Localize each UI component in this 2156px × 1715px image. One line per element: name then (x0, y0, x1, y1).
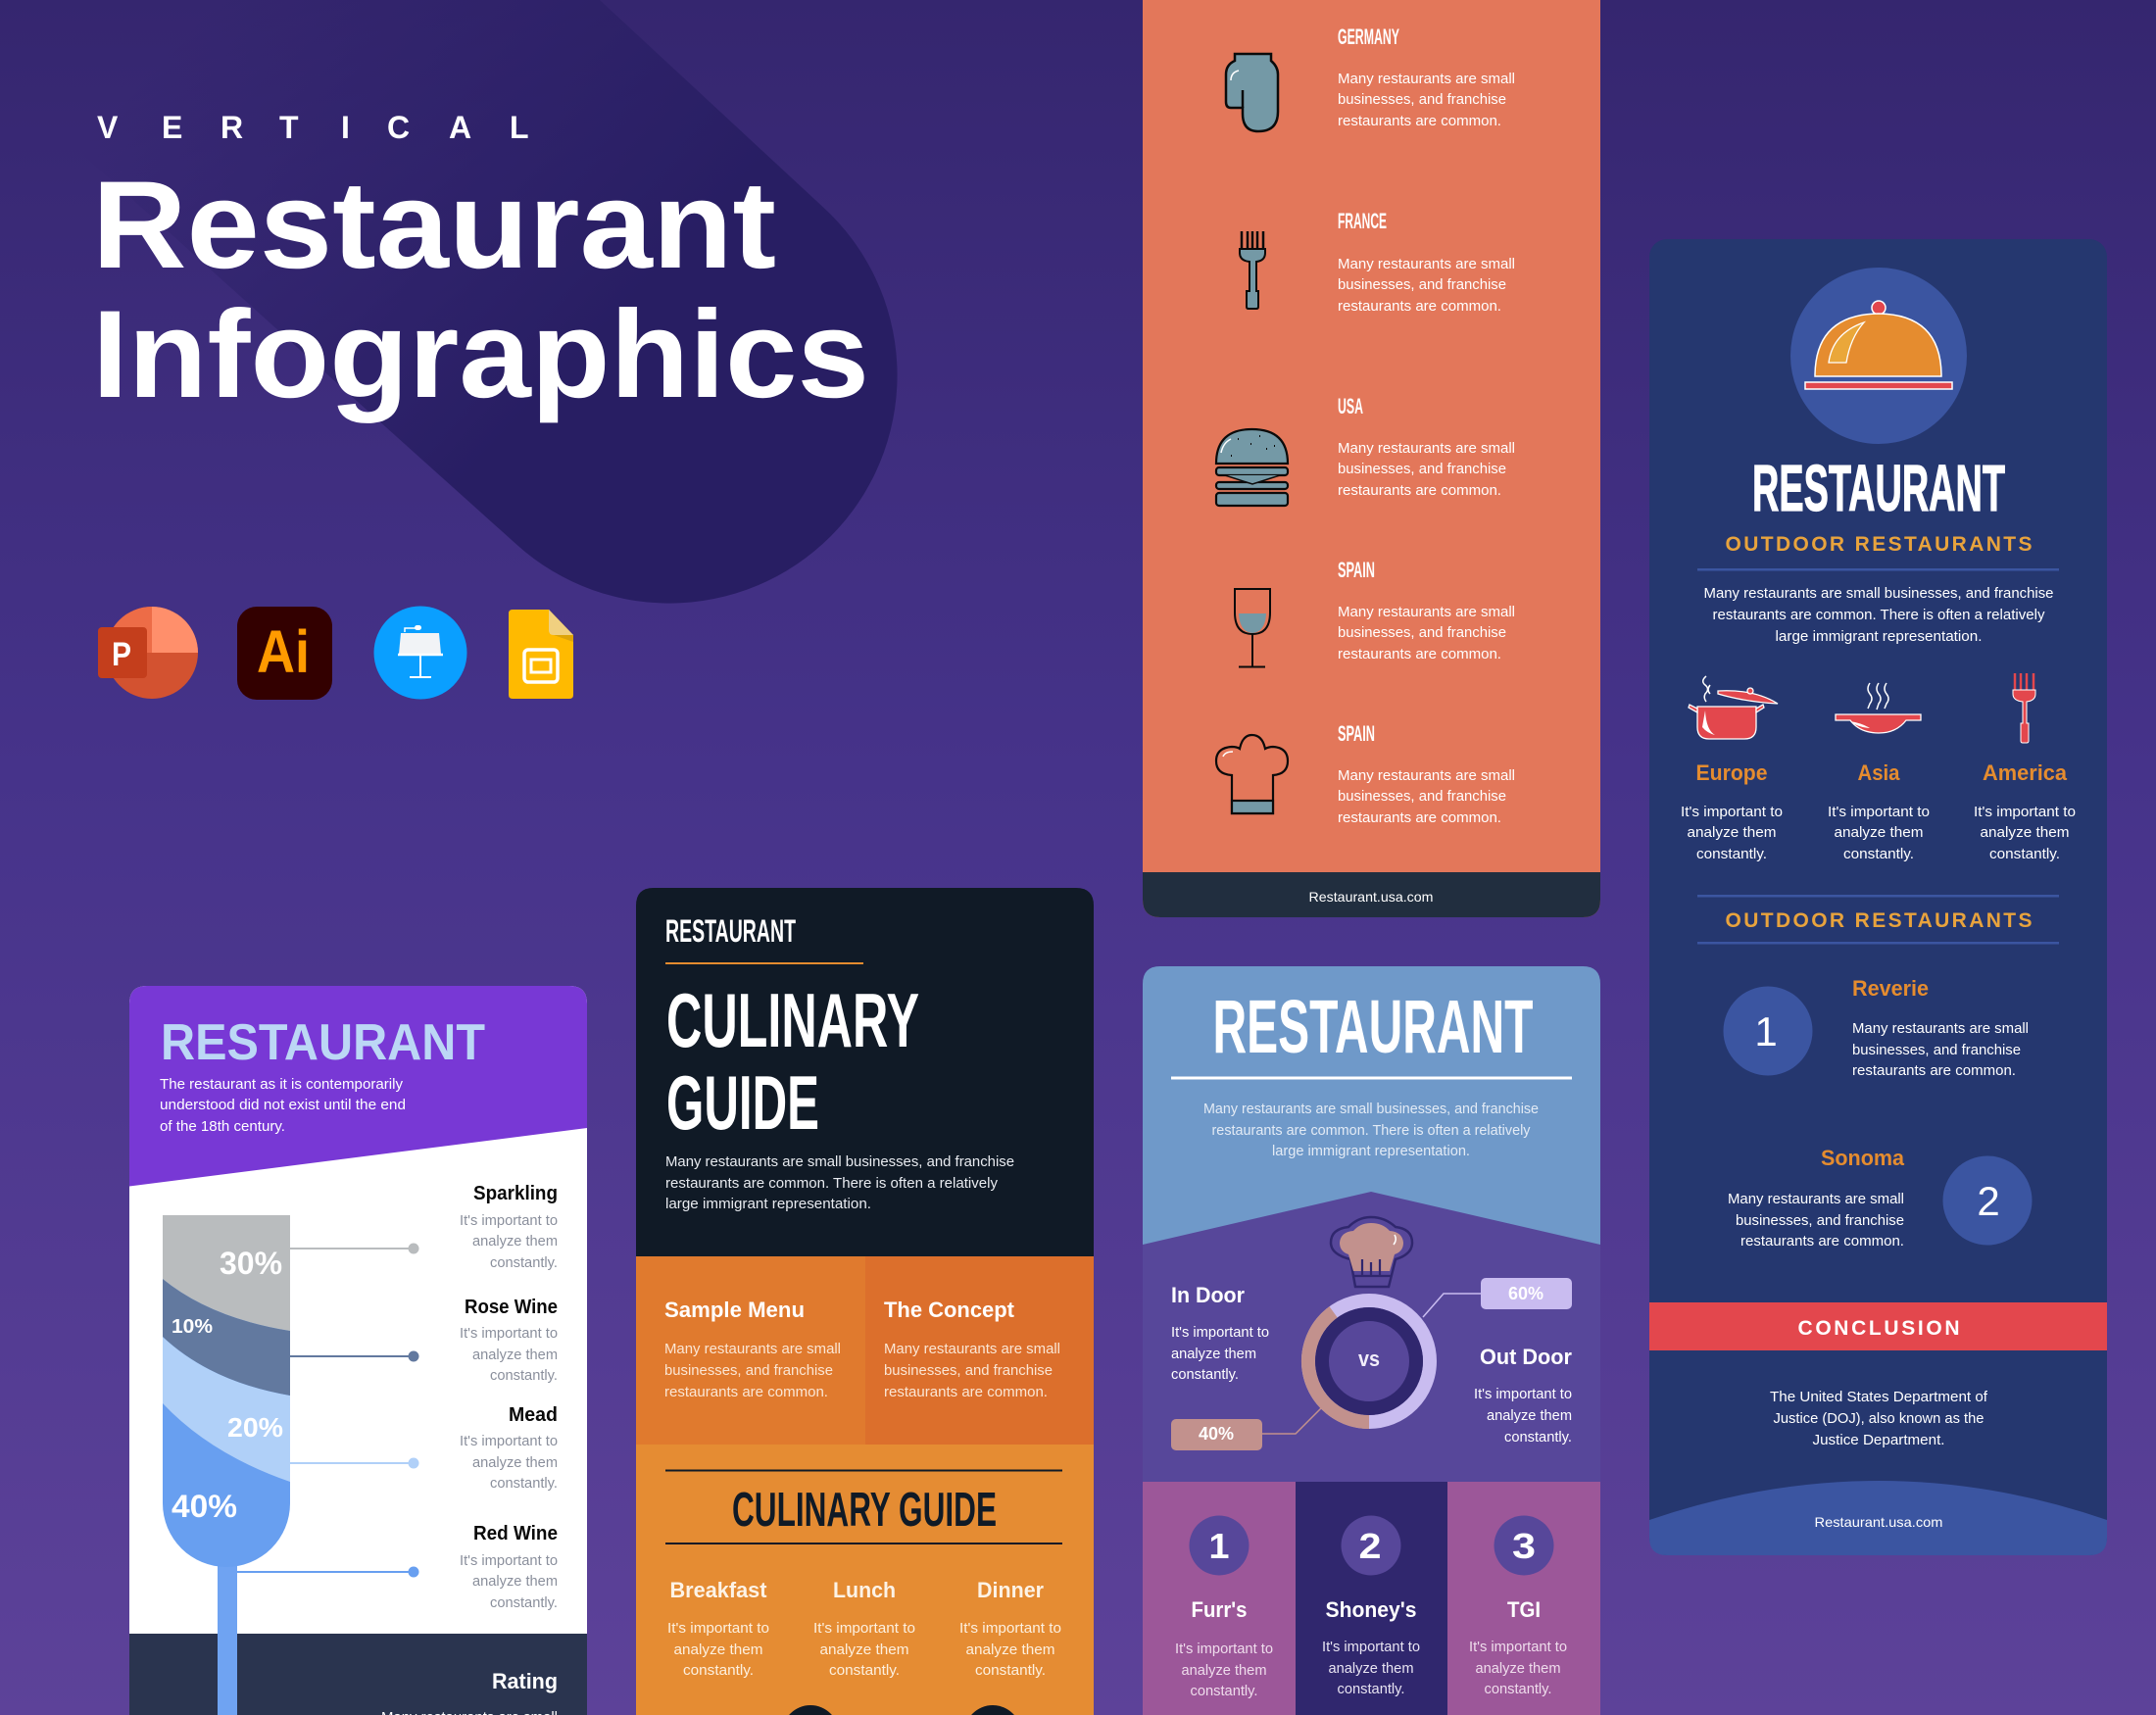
column: Shoney's: 2 (1358, 1526, 1382, 1566)
text: Out Door: analyze them (1487, 1407, 1572, 1424)
heading: RESTAURANT (1213, 985, 1533, 1069)
column: Europe: It's important to (1681, 804, 1783, 820)
subheading: OUTDOOR RESTAURANTS (1725, 909, 2033, 932)
column: America: It's important to (1974, 804, 2076, 820)
item: Sonoma (1728, 1146, 1905, 1250)
section: Sample Menu: Many restaurants are small (664, 1341, 841, 1357)
text: Germany (1338, 24, 1515, 129)
text: Germany: GERMANY (1338, 24, 1399, 49)
icon: oven mitt (1226, 54, 1278, 131)
icon: PowerPoint (98, 607, 198, 699)
footer bar: Restaurant.usa.com (1309, 889, 1433, 905)
column: Lunch: Lunch (833, 1578, 896, 1602)
text: Spain second (1338, 721, 1515, 826)
text: France: FRANCE (1338, 209, 1387, 233)
text: USA: USA (1338, 394, 1363, 418)
text: USA: businesses, and franchise (1338, 461, 1506, 477)
heading: RESTAURANT (665, 913, 796, 949)
item: Reverie: Reverie (1852, 976, 1929, 1001)
column: Furr's: 1 (1209, 1526, 1229, 1566)
wine glass chart: 20% (227, 1412, 283, 1443)
text: Red Wine: It's important to (460, 1552, 558, 1569)
section: Sample Menu: businesses, and franchise (664, 1362, 833, 1379)
icon: Illustrator (237, 607, 332, 700)
column: TGI: analyze them (1476, 1660, 1560, 1677)
item: Reverie: restaurants are common. (1852, 1062, 2016, 1079)
column: Shoney's: constantly. (1337, 1681, 1405, 1697)
column: Dinner: analyze them (966, 1642, 1054, 1658)
text: Germany: businesses, and franchise (1338, 91, 1506, 108)
text: France (1338, 209, 1515, 315)
text: In Door: constantly. (1171, 1366, 1239, 1383)
text: Mead (460, 1404, 558, 1492)
section: orange meals (636, 1445, 1094, 1715)
wine glass chart: 40% (172, 1489, 237, 1524)
panel: orange countries card (1143, 0, 1600, 917)
header: of the 18th century. (160, 1118, 285, 1135)
title: Infographics (92, 284, 869, 423)
section: The Concept: The Concept (884, 1298, 1015, 1322)
text: USA: Many restaurants are small (1338, 440, 1515, 457)
column: Europe: Europe (1695, 760, 1768, 785)
icon: red fork (2013, 673, 2035, 743)
section: The Concept (865, 1256, 1094, 1445)
icon: Illustrator: Ai (257, 618, 310, 685)
icon: Google Slides (509, 610, 573, 699)
column: Breakfast: Breakfast (670, 1578, 767, 1602)
header: The restaurant as it is contemporarily (160, 1076, 403, 1093)
text: Rose Wine: Rose Wine (465, 1297, 558, 1318)
text: France: businesses, and franchise (1338, 276, 1506, 293)
text: USA: restaurants are common. (1338, 482, 1501, 499)
callout: 40 percent (1171, 1408, 1321, 1450)
icon: Keynote (374, 606, 466, 700)
column: Dinner (959, 1578, 1061, 1679)
heading: CULINARY (666, 977, 919, 1063)
footer arc (1649, 1481, 2107, 1555)
icon: PowerPoint: P (112, 636, 131, 673)
text: USA (1338, 394, 1515, 499)
donut chart: vs (1358, 1347, 1380, 1371)
column: Breakfast (667, 1578, 769, 1679)
column: Lunch (813, 1578, 915, 1679)
text: Spain second: businesses, and franchise (1338, 788, 1506, 805)
text: Mead: constantly. (490, 1475, 558, 1492)
column: Shoney's (1296, 1482, 1447, 1715)
text: Out Door: constantly. (1504, 1429, 1572, 1446)
text: Sparkling: analyze them (472, 1233, 558, 1250)
intro text (665, 1153, 1014, 1212)
callout: 60 percent (1423, 1278, 1572, 1317)
column: TGI: TGI (1507, 1597, 1541, 1622)
column: Furr's: constantly. (1190, 1683, 1258, 1699)
item: Reverie (1852, 976, 2029, 1079)
text: Germany: restaurants are common. (1338, 113, 1501, 129)
number badge 2 (1942, 1156, 2033, 1245)
column: Furr's: It's important to (1175, 1641, 1273, 1657)
text: Sparkling: It's important to (460, 1212, 558, 1229)
column: Lunch: constantly. (829, 1662, 900, 1679)
text: Rose Wine (460, 1297, 558, 1384)
column: Europe (1681, 760, 1783, 862)
column: America: America (1983, 760, 2068, 785)
section: The Concept: Many restaurants are small (884, 1341, 1060, 1357)
column: Europe: analyze them (1688, 824, 1776, 841)
text: In Door: It's important to (1171, 1324, 1269, 1341)
text: Out Door (1474, 1345, 1572, 1446)
section: Sample Menu: Sample Menu (664, 1298, 805, 1322)
intro text: large immigrant representation. (1272, 1143, 1470, 1159)
column: Asia (1828, 760, 1930, 862)
text: Out Door: It's important to (1474, 1386, 1572, 1402)
section: The Concept: restaurants are common. (884, 1384, 1048, 1400)
text: Sparkling: constantly. (490, 1254, 558, 1271)
section: The Concept: businesses, and franchise (884, 1362, 1053, 1379)
footer arc: Restaurant.usa.com (1815, 1514, 1942, 1530)
conclusion text: Justice Department. (1813, 1432, 1944, 1448)
dark badge right (964, 1705, 1021, 1715)
text: Red Wine: Red Wine (473, 1523, 558, 1544)
column: Shoney's: analyze them (1329, 1660, 1413, 1677)
connector: Mead (290, 1458, 419, 1468)
column: Dinner: constantly. (975, 1662, 1046, 1679)
callout: 60 percent: 60% (1508, 1284, 1544, 1303)
panel: wine card (129, 986, 587, 1715)
text: Spain (1338, 558, 1515, 662)
number badge 1: 1 (1754, 1008, 1778, 1054)
text: Spain second: restaurants are common. (1338, 809, 1501, 826)
column: Asia: analyze them (1835, 824, 1923, 841)
header: RESTAURANT (161, 1014, 485, 1071)
icon: cloche (1790, 268, 1967, 444)
column: America (1974, 760, 2076, 862)
column: Asia: Asia (1858, 760, 1900, 785)
column: Asia: constantly. (1843, 846, 1914, 862)
icon: burger (1216, 429, 1288, 506)
column: Asia: It's important to (1828, 804, 1930, 820)
title: VERTICAL (97, 110, 529, 145)
intro text: Many restaurants are small businesses, and franchise (1703, 585, 2054, 602)
icon: chef hat (1331, 1217, 1412, 1287)
column: Breakfast: constantly. (683, 1662, 754, 1679)
wine glass chart: 30% (220, 1246, 282, 1281)
panel: navy outdoor restaurants card (1649, 239, 2107, 1555)
text: Spain second: Many restaurants are small (1338, 767, 1515, 784)
text: Red Wine: constantly. (490, 1594, 558, 1611)
text: France: restaurants are common. (1338, 298, 1501, 315)
item: Sonoma: Sonoma (1821, 1146, 1905, 1170)
column: TGI: constantly. (1484, 1681, 1552, 1697)
purple section (1143, 1192, 1600, 1715)
column: Dinner: It's important to (959, 1620, 1061, 1637)
intro text: restaurants are common. There is often a relatively (665, 1175, 998, 1192)
heading (665, 913, 919, 1146)
title: Restaurant (92, 155, 776, 294)
conclusion text: Justice (DOJ), also known as the (1774, 1410, 1984, 1427)
wine glass chart (163, 1215, 290, 1715)
text: Spain: Many restaurants are small (1338, 604, 1515, 620)
text: In Door (1171, 1283, 1269, 1383)
item: Reverie: businesses, and franchise (1852, 1042, 2021, 1058)
text: In Door: analyze them (1171, 1346, 1256, 1362)
dark badge left (782, 1705, 839, 1715)
rating bar (129, 1634, 587, 1715)
column: America: analyze them (1980, 824, 2070, 841)
connector: Rose Wine (290, 1350, 419, 1362)
text: Rose Wine: constantly. (490, 1367, 558, 1384)
title (92, 110, 869, 423)
item: Sonoma: Many restaurants are small (1728, 1191, 1904, 1207)
intro text: restaurants are common. There is often a relatively (1713, 607, 2045, 623)
background blob (0, 0, 898, 604)
intro text: Many restaurants are small businesses, and franchise (665, 1153, 1014, 1170)
text: Out Door: Out Door (1480, 1345, 1572, 1369)
column: Breakfast: analyze them (674, 1642, 762, 1658)
text: Spain: businesses, and franchise (1338, 624, 1506, 641)
conclusion bar (1649, 1302, 2107, 1350)
icon: fork (1240, 231, 1265, 309)
number badge 1 (1723, 986, 1813, 1076)
footer bar (1143, 872, 1600, 917)
donut chart (1308, 1300, 1430, 1422)
panel: blue and purple indoor outdoor card (1143, 966, 1600, 1715)
heading (1171, 985, 1572, 1080)
column: Furr's: analyze them (1182, 1662, 1266, 1679)
text: France: Many restaurants are small (1338, 256, 1515, 272)
text: Mead: It's important to (460, 1433, 558, 1449)
number badge 2: 2 (1977, 1178, 2000, 1224)
column: Europe: constantly. (1696, 846, 1767, 862)
column: Dinner: Dinner (977, 1578, 1044, 1602)
conclusion bar: CONCLUSION (1797, 1317, 1960, 1340)
panel: culinary guide card (636, 888, 1094, 1715)
section: Sample Menu (636, 1256, 865, 1445)
heading: OUTDOOR RESTAURANTS (1725, 533, 2033, 556)
text: In Door: In Door (1171, 1283, 1245, 1307)
column: America: constantly. (1989, 846, 2060, 862)
connector: Sparkling (290, 1243, 419, 1254)
section: Sample Menu: restaurants are common. (664, 1384, 828, 1400)
text: Spain second: SPAIN (1338, 721, 1375, 746)
column: Furr's (1143, 1482, 1296, 1715)
column: Breakfast: It's important to (667, 1620, 769, 1637)
text: Sparkling: Sparkling (473, 1183, 558, 1204)
item: Sonoma: businesses, and franchise (1736, 1212, 1904, 1229)
text: Sparkling (460, 1183, 558, 1271)
item: Sonoma: restaurants are common. (1740, 1233, 1904, 1250)
conclusion text (1770, 1389, 1988, 1448)
header: understood did not exist until the end (160, 1097, 406, 1113)
text: Mead: analyze them (472, 1454, 558, 1471)
wine glass chart: 10% (172, 1316, 213, 1338)
conclusion text: The United States Department of (1770, 1389, 1988, 1405)
intro text: restaurants are common. There is often a relatively (1211, 1122, 1531, 1139)
text: Rose Wine: analyze them (472, 1347, 558, 1363)
column: TGI (1447, 1482, 1600, 1715)
text: Spain: SPAIN (1338, 558, 1375, 582)
item: Reverie: Many restaurants are small (1852, 1020, 2029, 1037)
heading: GUIDE (666, 1059, 819, 1146)
column: Shoney's: Shoney's (1325, 1597, 1417, 1622)
connector: Red Wine (237, 1566, 419, 1578)
text: Red Wine: analyze them (472, 1573, 558, 1590)
intro text (1203, 1101, 1539, 1159)
callout: 40 percent: 40% (1199, 1424, 1234, 1444)
icon: pot (1689, 676, 1778, 739)
text: Spain: restaurants are common. (1338, 646, 1501, 662)
icon: wok (1836, 683, 1921, 733)
text: Mead: Mead (509, 1404, 558, 1426)
column: Lunch: It's important to (813, 1620, 915, 1637)
column: Shoney's: It's important to (1322, 1639, 1420, 1655)
header (129, 986, 587, 1186)
heading (1697, 452, 2059, 570)
column: Furr's: Furr's (1192, 1597, 1247, 1622)
icon: wine glass (1235, 589, 1270, 666)
text: Germany: Many restaurants are small (1338, 71, 1515, 87)
text: Rose Wine: It's important to (460, 1325, 558, 1342)
text: Red Wine (460, 1523, 558, 1611)
intro text (1703, 585, 2054, 645)
subheading: CULINARY GUIDE (732, 1484, 997, 1537)
column: Lunch: analyze them (819, 1642, 909, 1658)
rating bar: Rating (492, 1669, 558, 1693)
column: TGI: It's important to (1469, 1639, 1567, 1655)
intro text: large immigrant representation. (1776, 628, 1982, 645)
icon: chef hat (1216, 735, 1288, 813)
column: TGI: 3 (1512, 1526, 1536, 1566)
intro text: Many restaurants are small businesses, and franchise (1203, 1101, 1539, 1117)
intro text: large immigrant representation. (665, 1196, 871, 1212)
